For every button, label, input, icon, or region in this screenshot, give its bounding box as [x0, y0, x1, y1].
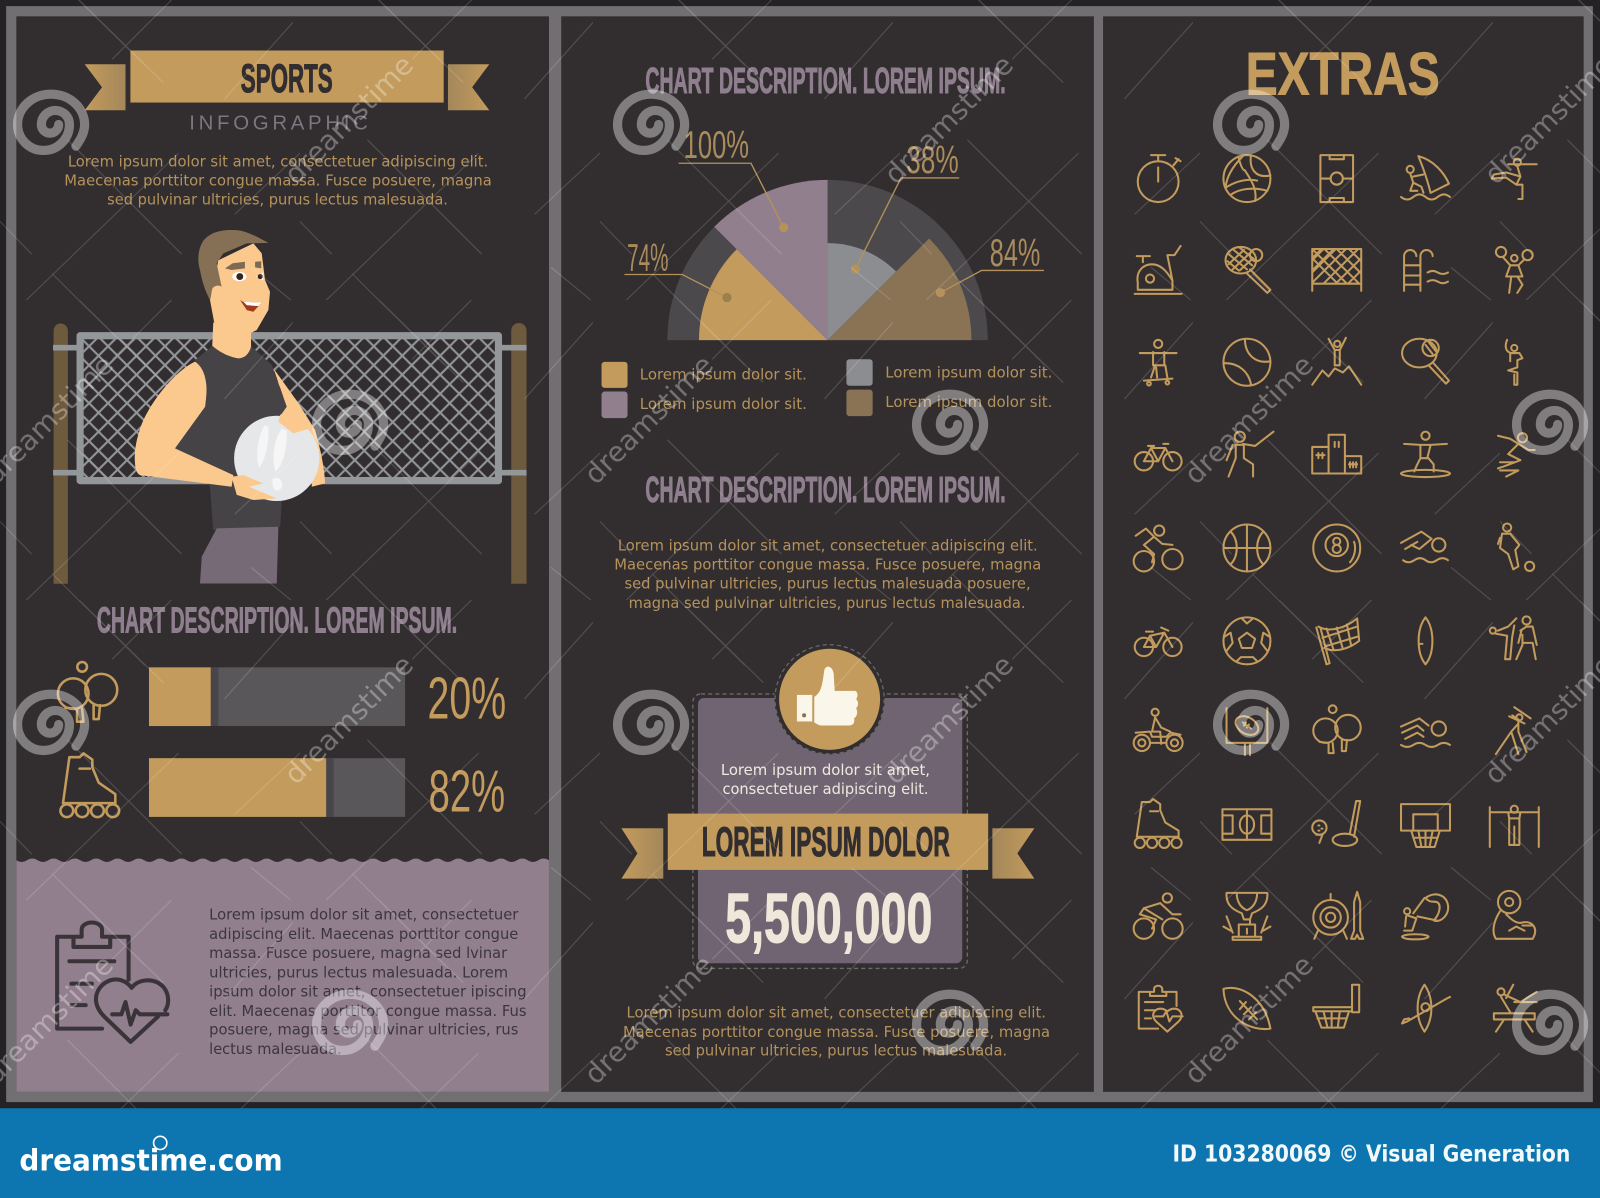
- icon: tennis racket: [1226, 247, 1270, 293]
- info text: elit. Maecenas porttitor congue massa. Fus: [209, 1003, 527, 1020]
- legend: Lorem ipsum dolor sit.: [640, 396, 807, 413]
- title banner: SPORTS: [241, 57, 333, 101]
- description text: magna sed pulvinar ultricies, purus lectus malesuada.: [629, 595, 1026, 612]
- card text: consectetuer adipiscing elit.: [722, 781, 929, 798]
- bar: 20 percent: [149, 664, 506, 731]
- info text: posuere, magna sed pulvinar ultricies, rus: [209, 1022, 518, 1039]
- info text: Lorem ipsum dolor sit amet, consectetuer: [209, 906, 519, 923]
- big number: 5,500,000: [725, 879, 932, 958]
- icon: archery target: [1313, 892, 1363, 939]
- wavy info band: [16, 858, 549, 1092]
- watermark text: dreamstime: [878, 649, 1020, 791]
- intro text: Lorem ipsum dolor sit amet, consectetuer adipiscing elit.: [68, 153, 488, 170]
- icon: winners podium: [1312, 435, 1361, 473]
- icon: clipboard heart: [57, 922, 168, 1042]
- icon: racing cyclist: [1134, 893, 1183, 939]
- callout: 74 percent: 74%: [627, 237, 668, 280]
- watermark text: dreamstime: [578, 349, 720, 491]
- icon: runner jumping: [1498, 433, 1535, 477]
- icon: surfer: [1401, 432, 1450, 477]
- info text: massa. Fusce posuere, magna sed lvinar: [209, 945, 508, 962]
- icon: stopwatch: [1138, 155, 1181, 202]
- icon: table tennis: [1313, 705, 1361, 753]
- legend: Lorem ipsum dolor sit.: [885, 394, 1052, 411]
- icon: checkered flag: [1316, 618, 1359, 664]
- icon: golf club: [1312, 801, 1360, 846]
- icon: windsurfing: [1401, 156, 1450, 199]
- volleyball net: [53, 323, 527, 584]
- heading: bar chart: CHART DESCRIPTION. LOREM IPSUM.: [97, 601, 457, 641]
- logo mark: [154, 1136, 167, 1150]
- icon: table tennis: [58, 662, 117, 722]
- description text: Lorem ipsum dolor sit amet, consectetuer adipiscing elit.: [618, 538, 1038, 555]
- icon: tennis ball: [1223, 339, 1270, 386]
- stat card: [621, 644, 1034, 968]
- icon: skateboarder: [1140, 340, 1177, 386]
- icon: kitesurfer: [1402, 894, 1448, 939]
- icon: golfer: [1496, 707, 1531, 754]
- icon: mountain climber: [1312, 338, 1361, 385]
- icon: karate duo: [1490, 616, 1537, 659]
- info text: ultricies, purus lectus malesuada. Lorem: [209, 965, 508, 982]
- player illustration: [135, 230, 325, 583]
- icon: goal net: [1312, 249, 1361, 291]
- callout: 100 percent: 100%: [684, 124, 749, 167]
- icon: football player: [1498, 523, 1534, 571]
- intro text: Maecenas porttitor congue massa. Fusce posuere, magna: [64, 173, 492, 190]
- icon: bicep with weight: [1494, 891, 1535, 939]
- callout: 38 percent: [851, 139, 959, 274]
- icon: roller skate: [60, 753, 119, 817]
- icon: volleyball: [1223, 155, 1270, 202]
- footer text: Lorem ipsum dolor sit amet, consectetuer adipiscing elit.: [627, 1004, 1046, 1021]
- intro text: [64, 153, 492, 209]
- heading: description: CHART DESCRIPTION. LOREM IPSUM.: [645, 470, 1006, 510]
- icon: soccer ball: [1223, 617, 1270, 664]
- watermark text: dreamstime: [878, 49, 1020, 191]
- icon: bicycle: [1135, 444, 1182, 470]
- icon: american football: [1223, 988, 1270, 1029]
- icon: kayak: [1402, 985, 1450, 1032]
- icon: bicycle city: [1135, 628, 1182, 656]
- icon: basketball hoop: [1313, 985, 1359, 1028]
- icon: health clipboard: [1139, 986, 1183, 1032]
- callout: 84 percent: [936, 232, 1044, 297]
- footer logo: dreamstime.com: [19, 1143, 283, 1177]
- icon: surfboard: [1419, 617, 1432, 664]
- footer bar: [0, 1108, 1600, 1198]
- footer text: [623, 1004, 1050, 1060]
- icon: swimmer: [1401, 532, 1448, 562]
- description text: sed pulvinar ultricies, purus lectus malesuada posuere,: [624, 575, 1031, 592]
- description text: Maecenas porttitor congue massa. Fusce posuere, magna: [614, 556, 1041, 573]
- info text: lectus malesuada.: [209, 1041, 342, 1058]
- info text: ipsum dolor sit amet, consectetuer ipiscing: [209, 983, 527, 1000]
- bar: 82 percent: 82%: [429, 758, 505, 825]
- bar: 20 percent: 20%: [428, 664, 506, 731]
- icon: cheerleader: [1496, 247, 1533, 293]
- intro text: sed pulvinar ultricies, purus lectus malesuada.: [107, 192, 448, 209]
- icon: exercise bike: [1135, 246, 1182, 294]
- bar: 82 percent: [149, 758, 505, 825]
- title banner: [85, 51, 489, 110]
- subtitle: INFOGRAPHIC: [189, 113, 368, 135]
- icon: basketball: [1223, 525, 1270, 571]
- description text: [614, 538, 1041, 612]
- legend: Lorem ipsum dolor sit.: [640, 367, 807, 384]
- icon: javelin figure: [1492, 159, 1537, 199]
- icon: trophy: [1223, 893, 1270, 940]
- ribbon: [621, 814, 1034, 879]
- icon grid: [1134, 155, 1539, 1032]
- heading: extras: EXTRAS: [1246, 41, 1440, 108]
- icon: quad bike rider: [1134, 709, 1183, 751]
- icon: racket and ball: [1402, 339, 1449, 384]
- footer text: sed pulvinar ultricies, purus lectus malesuada.: [665, 1043, 1007, 1060]
- callout: 74 percent: [624, 237, 732, 302]
- icon: eight ball: [1313, 525, 1360, 571]
- panel: charts: [561, 16, 1094, 1092]
- icon: gymnast vault: [1494, 985, 1537, 1032]
- icon: dancer: [1506, 340, 1522, 385]
- callout: 38 percent: 38%: [906, 139, 959, 182]
- card text: [721, 762, 930, 798]
- footer text: Maecenas porttitor congue massa. Fusce posuere, magna: [623, 1024, 1050, 1041]
- icon: inline skate: [1135, 799, 1182, 848]
- icon: crawl swimmer: [1401, 718, 1450, 747]
- icon: field horizontal: [1222, 809, 1271, 840]
- info text: adipiscing elit. Maecenas porttitor congue: [209, 926, 518, 943]
- icon: basketball backboard: [1401, 804, 1450, 847]
- heading: semicircle chart: CHART DESCRIPTION. LOREM IPSUM.: [645, 61, 1006, 101]
- icon: soccer field: [1320, 155, 1353, 202]
- watermark text: dreamstime: [1178, 349, 1320, 491]
- callout: 84 percent: 84%: [990, 232, 1040, 275]
- legend: [602, 359, 1052, 418]
- ribbon: LOREM IPSUM DOLOR: [702, 818, 950, 865]
- semicircle chart: [624, 124, 1044, 340]
- panel: sports overview: [16, 16, 549, 1092]
- watermark spirals: [18, 94, 1584, 1050]
- icon: cyclist: [1134, 526, 1183, 571]
- watermark text: dreamstime: [278, 49, 420, 191]
- watermark text: dreamstime: [278, 649, 420, 791]
- panel: extras: [1103, 16, 1584, 1092]
- icon: swimming pool ladder: [1404, 250, 1448, 291]
- info text: [209, 906, 527, 1058]
- watermark text: dreamstime: [1178, 949, 1320, 1091]
- icon: thumbs up: [774, 644, 885, 754]
- legend: Lorem ipsum dolor sit.: [885, 365, 1052, 382]
- callout: 100 percent: [679, 124, 788, 232]
- icon: fencer: [1227, 432, 1273, 477]
- card text: Lorem ipsum dolor sit amet,: [721, 762, 930, 779]
- icon: pull up bars: [1490, 806, 1539, 847]
- watermark text: dreamstime: [578, 949, 720, 1091]
- icon: rugby goal: [1227, 708, 1267, 755]
